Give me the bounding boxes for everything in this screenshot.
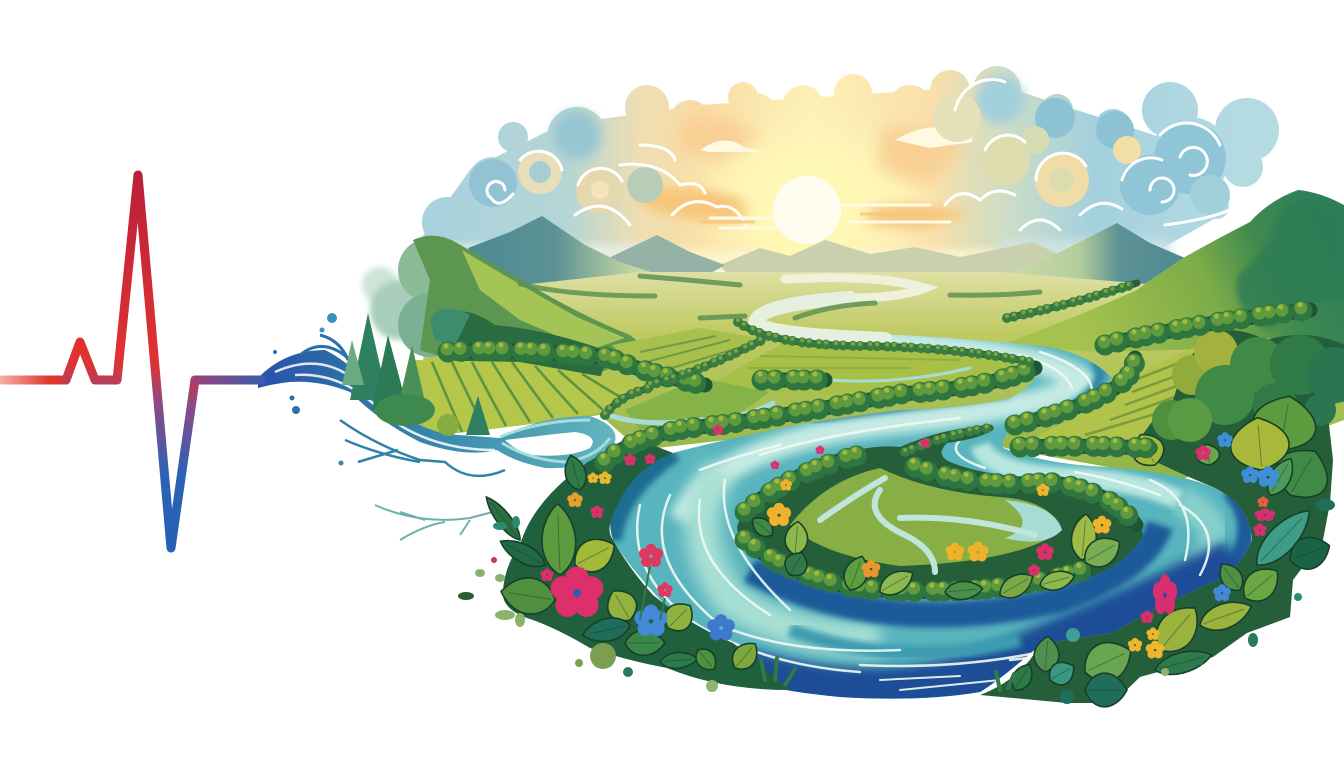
island leaves xyxy=(748,513,1126,604)
side channels xyxy=(603,368,970,423)
warm light and cloud colouring xyxy=(430,117,1170,275)
left conifers xyxy=(342,313,490,436)
left stream xyxy=(258,313,616,540)
ECG pulse line xyxy=(2,175,262,548)
right hill xyxy=(1000,190,1344,352)
right foreground foliage xyxy=(980,330,1344,707)
left foreground foliage xyxy=(458,440,795,692)
left tree hill xyxy=(362,236,655,378)
island xyxy=(737,427,1143,598)
striped fields xyxy=(413,328,1300,450)
main river xyxy=(610,334,1252,699)
farmland base xyxy=(415,272,1344,480)
tree bands xyxy=(446,276,1310,591)
upper river xyxy=(755,278,925,339)
river ripples xyxy=(637,352,1209,690)
mountains xyxy=(468,216,1185,310)
left blue cloud swirls xyxy=(469,111,747,229)
sky and cloud mass xyxy=(420,66,1279,270)
flowers xyxy=(491,424,1279,658)
sun xyxy=(700,146,950,270)
right blue cloud swirls xyxy=(933,76,1230,230)
